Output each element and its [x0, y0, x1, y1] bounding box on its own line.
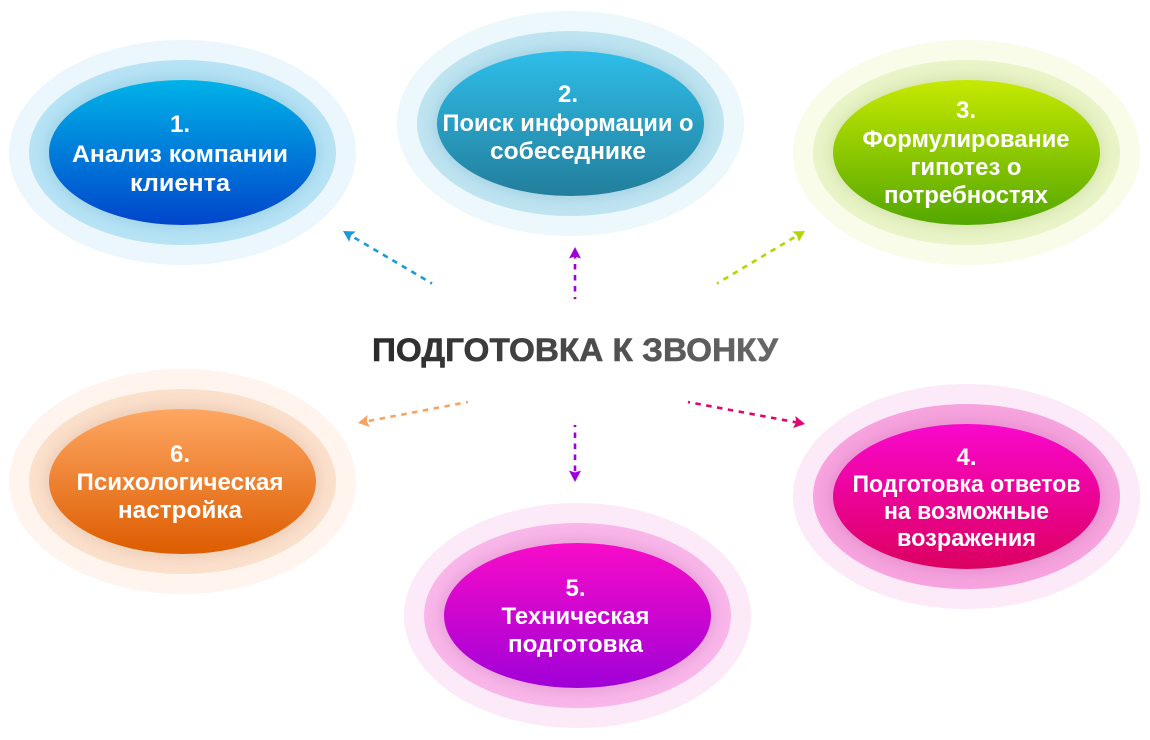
step 3 text: Формулирование — [862, 126, 1070, 153]
step 2 text: собеседнике — [490, 138, 646, 165]
step 5 text: подготовка — [508, 631, 644, 658]
title: ПОДГОТОВКА К ЗВОНКУ — [372, 332, 779, 368]
step 6 text: настройка — [118, 497, 243, 524]
middle halo — [813, 60, 1120, 245]
inner ellipse — [49, 409, 316, 554]
step 6 text: Психологическая — [76, 469, 284, 496]
outer halo — [793, 384, 1140, 609]
arrow: to step 5 — [569, 425, 581, 482]
arrow: to step 2 — [569, 247, 581, 299]
inner ellipse — [49, 80, 316, 225]
middle halo — [417, 31, 724, 216]
outer halo — [404, 503, 751, 728]
step 3 text — [862, 97, 1070, 209]
step 4 text: Подготовка ответов — [852, 471, 1080, 498]
step 4 text — [852, 444, 1080, 552]
inner ellipse — [437, 51, 704, 196]
inner ellipse — [444, 543, 711, 688]
step 2 text — [442, 81, 694, 165]
panel: step 6 — [9, 369, 356, 594]
step 4 text: возражения — [897, 525, 1036, 552]
panel: step 1 — [9, 40, 356, 265]
step 4 text: на возможные — [884, 498, 1049, 525]
outer halo — [397, 11, 744, 236]
step 2 text: Поиск информации о — [442, 110, 694, 137]
arrow: to step 3 — [717, 231, 805, 284]
panel: step 3 — [793, 40, 1140, 265]
step 6 text — [76, 441, 284, 524]
step 6 text: 6. — [170, 441, 190, 468]
inner ellipse — [833, 424, 1100, 569]
arrow: to step 1 — [343, 231, 432, 284]
step 5 text: 5. — [565, 575, 586, 602]
middle halo — [424, 523, 731, 708]
step 3 text: гипотез о — [910, 154, 1022, 181]
panel: step 4 — [793, 384, 1140, 609]
inner ellipse — [833, 80, 1100, 225]
arrow: to step 4 — [688, 402, 805, 428]
step 1 text: клиента — [130, 170, 231, 197]
step 3 text: 3. — [956, 97, 976, 124]
middle halo — [813, 404, 1120, 589]
step 4 text: 4. — [956, 444, 977, 471]
step 1 text: Анализ компании — [72, 141, 288, 168]
arrow: to step 6 — [358, 402, 468, 427]
step 5 text: Техническая — [502, 603, 650, 630]
step 1 text — [72, 111, 288, 197]
middle halo — [29, 60, 336, 245]
outer halo — [9, 40, 356, 265]
step 5 text — [502, 575, 650, 658]
step 3 text: потребностях — [884, 182, 1049, 209]
step 1 text: 1. — [170, 111, 190, 138]
panel: step 2 — [397, 11, 744, 236]
step 2 text: 2. — [558, 81, 578, 108]
outer halo — [793, 40, 1140, 265]
panel: step 5 — [404, 503, 751, 728]
outer halo — [9, 369, 356, 594]
middle halo — [29, 389, 336, 574]
